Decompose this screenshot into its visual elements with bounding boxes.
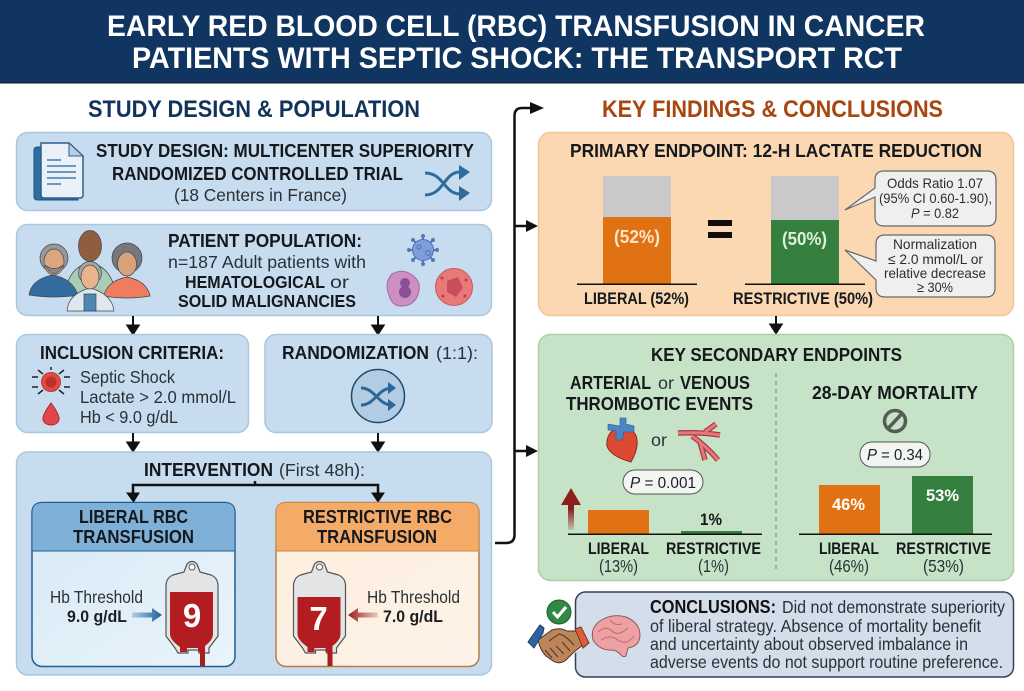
arrow: threshold into bag [132,608,162,622]
chart: mortality bars: 53% [926,486,959,505]
subpanel: 28-day mortality: (46%) [829,556,869,576]
chart: restrictive lactate bar [745,176,865,285]
icon: document [34,143,83,200]
icon: patient group [29,230,150,311]
subpanel: 28-day mortality: (53%) [923,556,964,576]
panel: conclusions: and uncertainty about observed imbalance in [650,634,968,654]
panel: patient population: PATIENT POPULATION: [168,230,362,251]
panel: conclusions [576,592,1014,677]
panel: inclusion criteria: INCLUSION CRITERIA: [40,342,224,363]
arrow: primary to secondary [770,316,782,333]
panel: primary endpoint [538,132,1014,316]
subpanel: thrombotic events: (1%) [698,556,729,576]
icon: brain [592,616,640,657]
chart: liberal lactate bar [577,176,697,285]
chart: mortality bars [799,476,992,535]
callout: odds ratio: (95% CI 0.60-1.90), [879,190,992,206]
panel: key secondary endpoints [538,334,1014,580]
icon: malignant cell red [436,268,472,306]
subpanel: thrombotic events: ARTERIAL [570,372,651,393]
panel: key secondary endpoints: KEY SECONDARY ENDPOINTS [651,344,902,365]
arrow: population to randomization [372,316,384,334]
subpanel: thrombotic events: (13%) [599,556,638,576]
panel: randomization: (1:1): [436,343,478,363]
panel: intervention: (First 48h): [279,460,365,480]
icon: check badge [547,600,571,624]
subpanel: 28-day mortality: LIBERAL [819,539,879,558]
panel: intervention [16,452,492,675]
title banner: EARLY RED BLOOD CELL (RBC) TRANSFUSION IN CANCER [107,10,925,43]
arrow: inclusion to intervention [128,433,138,451]
panel: intervention: INTERVENTION [144,459,273,480]
subpanel: 28-day mortality: RESTRICTIVE [896,539,991,558]
callout: thrombotic p value: P = 0.001 [630,475,696,492]
panel: liberal arm: LIBERAL RBC [79,506,188,527]
panel: conclusions: Did not demonstrate superiority [782,597,1005,617]
title banner: PATIENTS WITH SEPTIC SHOCK: THE TRANSPORT RCT [132,42,902,75]
panel: primary endpoint: LIBERAL (52%) [584,289,689,308]
icon: shuffle arrows [425,165,470,201]
callout: mortality p value: P = 0.34 [867,447,923,464]
arrow: connector to key findings [495,102,544,543]
panel: study design [16,132,492,210]
icon: blood bag 9: 9 [183,597,201,634]
callout: normalization definition: ≤ 2.0 mmol/L or [888,251,983,267]
callout: normalization definition: ≥ 30% [917,279,953,295]
icon: randomization shuffle [352,370,404,422]
chart: thrombotic events bars: 1% [700,510,722,529]
panel: patient population: SOLID MALIGNANCIES [178,291,356,311]
panel: inclusion criteria: Hb < 9.0 g/dL [80,407,178,427]
arrow: randomization to intervention [372,433,384,451]
panel: restrictive arm [276,502,479,666]
callout: normalization definition [845,235,995,297]
panel: liberal arm [32,502,235,666]
panel: conclusions: of liberal strategy. Absence of mortality benefit [650,616,981,636]
icon: handshake [528,625,589,663]
chart: restrictive lactate bar: (50%) [782,229,827,249]
panel: liberal arm: TRANSFUSION [73,526,194,547]
callout: thrombotic p value [623,470,703,494]
panel: liberal arm: 9.0 g/dL [67,607,127,626]
subpanel: 28-day mortality [799,382,992,576]
panel: patient population: n=187 Adult patients with [168,252,366,272]
panel: study design: RANDOMIZED CONTROLLED TRIAL [112,163,403,184]
callout: odds ratio: Odds Ratio 1.07 [887,175,983,191]
title banner [0,0,1024,84]
icon: virus cell [407,234,439,266]
panel: study design: (18 Centers in France) [174,185,347,205]
panel: patient population: HEMATOLOGICAL [185,272,325,292]
heading: key findings and conclusions: KEY FINDINGS & CONCLUSIONS [602,96,943,123]
panel: restrictive arm: RESTRICTIVE RBC [303,506,452,527]
icon: blood bag 7 [294,562,346,666]
panel: conclusions: CONCLUSIONS: [650,597,776,617]
panel: randomization [265,334,492,432]
arrow: threshold into bag [348,608,378,622]
callout: normalization definition: relative decrease [884,265,986,281]
panel: patient population: or [330,272,349,292]
panel: restrictive arm: Hb Threshold [367,587,460,607]
subpanel: thrombotic events: or [658,373,674,393]
icon: heart [607,418,637,462]
icon: blood vessel [678,424,720,460]
arrow: population to inclusion [128,316,138,334]
subpanel: thrombotic events: VENOUS [680,372,750,393]
subpanel: thrombotic events: THROMBOTIC EVENTS [566,393,753,414]
callout: normalization definition: Normalization [893,236,977,252]
panel: inclusion criteria: Lactate > 2.0 mmol/L [80,387,236,407]
icon: malignant cell pink [387,271,419,306]
icon: up arrow [561,488,581,530]
panel: inclusion criteria [16,334,248,432]
panel: randomization: RANDOMIZATION [282,342,429,363]
arrow: intervention split [127,481,384,502]
chart: thrombotic events bars [568,510,762,535]
subpanel: thrombotic events: LIBERAL [588,539,649,558]
icon: blood bag 9 [166,562,218,666]
icon: blood drop [43,403,59,425]
callout: odds ratio [845,171,996,226]
callout: mortality p value [860,442,930,467]
icon: prohibition [884,410,906,432]
panel: primary endpoint: PRIMARY ENDPOINT: 12-H LACTATE REDUCTION [570,140,982,161]
icon: blood bag 7: 7 [309,600,328,637]
subpanel: thrombotic events: RESTRICTIVE [666,539,761,558]
panel: primary endpoint: RESTRICTIVE (50%) [733,289,873,308]
panel: patient population [16,224,492,316]
panel: restrictive arm: TRANSFUSION [317,526,437,547]
subpanel: thrombotic events: or [651,430,667,450]
icon: septic shock [32,367,70,394]
panel: inclusion criteria: Septic Shock [80,367,175,387]
callout: odds ratio: P = 0.82 [911,205,959,221]
panel: restrictive arm: 7.0 g/dL [383,607,443,626]
chart: mortality bars: 46% [832,495,865,514]
subpanel: 28-day mortality: 28-DAY MORTALITY [812,382,979,403]
heading: study design and population: STUDY DESIGN & POPULATION [88,96,420,123]
icon: equals sign [708,220,732,238]
panel: liberal arm: Hb Threshold [50,587,143,607]
chart: liberal lactate bar: (52%) [614,227,660,247]
subpanel: thrombotic events [561,372,762,576]
panel: study design: STUDY DESIGN: MULTICENTER SUPERIORITY [96,140,475,161]
